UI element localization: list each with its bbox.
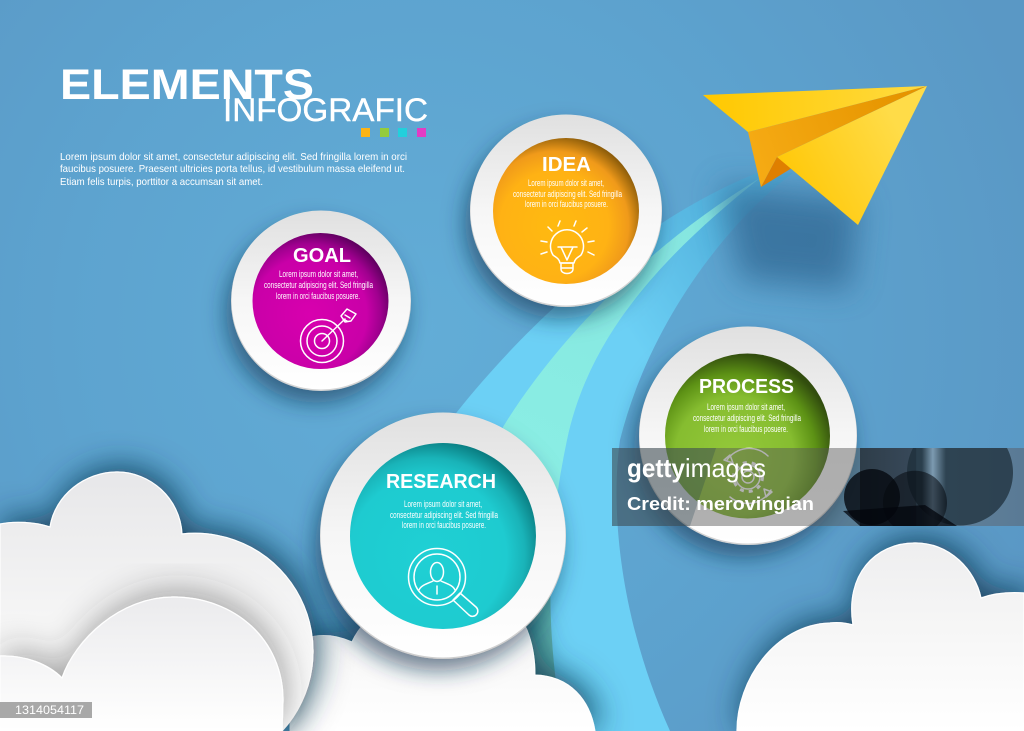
intro text: Lorem ipsum dolor sit amet, consectetur adipiscing elit. Sed fringilla lorem in orci <box>60 151 407 163</box>
icon: light bulb <box>541 221 594 274</box>
panel: process: lorem in orci faucibus posuere. <box>704 424 788 434</box>
panel: research: lorem in orci faucibus posuere. <box>402 520 486 530</box>
panel: goal: consectetur adipiscing elit. Sed fringilla <box>264 280 373 290</box>
title: INFOGRAFIC <box>223 92 428 128</box>
title <box>60 61 428 128</box>
intro text <box>60 151 407 188</box>
image id tag: 1314054117 <box>15 705 84 717</box>
panel: idea: IDEA <box>542 154 591 176</box>
title: ELEMENTS <box>60 61 314 109</box>
panel: research: Lorem ipsum dolor sit amet, <box>404 499 482 509</box>
plane: keel <box>748 86 927 187</box>
watermark band: images <box>685 453 766 483</box>
flight trail: blue band <box>400 173 793 731</box>
icon: gear cycle <box>724 448 772 504</box>
intro text: faucibus posuere. Praesent ultricies porta tellus, id vestibulum massa eleifend ut. <box>60 163 405 175</box>
panel: idea: Lorem ipsum dolor sit amet, <box>528 178 604 188</box>
icon: target <box>300 309 356 362</box>
watermark band: getty <box>627 453 685 483</box>
icon: magnifier with person <box>408 548 478 616</box>
intro text: Etiam felis turpis, porttitor a accumsan sit amet. <box>60 176 263 188</box>
panel: process: PROCESS <box>699 376 794 398</box>
panel: research <box>320 412 566 659</box>
plane: shaded inner fold <box>761 157 792 187</box>
panel: research: consectetur adipiscing elit. Sed fringilla <box>390 510 498 520</box>
panel: goal: lorem in orci faucibus posuere. <box>276 291 360 301</box>
paper plane <box>703 86 927 225</box>
plane: top wing <box>703 86 927 132</box>
panel: goal: GOAL <box>293 245 351 267</box>
cloud: front left <box>0 597 283 731</box>
panel: goal: Lorem ipsum dolor sit amet, <box>279 269 358 279</box>
panel: idea <box>470 114 662 307</box>
panel: goal <box>231 210 411 391</box>
cloud: middle <box>290 590 595 731</box>
panel: process: Lorem ipsum dolor sit amet, <box>707 402 785 412</box>
flight trail: mint band <box>490 178 760 690</box>
panel: idea: lorem in orci faucibus posuere. <box>525 199 608 209</box>
panel: research: RESEARCH <box>386 471 496 493</box>
image id tag <box>0 702 92 718</box>
plane: right wing <box>777 86 927 225</box>
panel: process: consectetur adipiscing elit. Sed fringilla <box>693 413 801 423</box>
colour squares <box>361 128 426 137</box>
watermark band: Credit: merovingian <box>627 494 814 514</box>
watermark band <box>612 448 1024 526</box>
cloud: right <box>737 543 1024 731</box>
plane shadow <box>720 185 860 290</box>
cloud: large left <box>0 472 313 731</box>
panel: idea: consectetur adipiscing elit. Sed fringilla <box>513 189 622 199</box>
panel: process <box>639 326 857 545</box>
